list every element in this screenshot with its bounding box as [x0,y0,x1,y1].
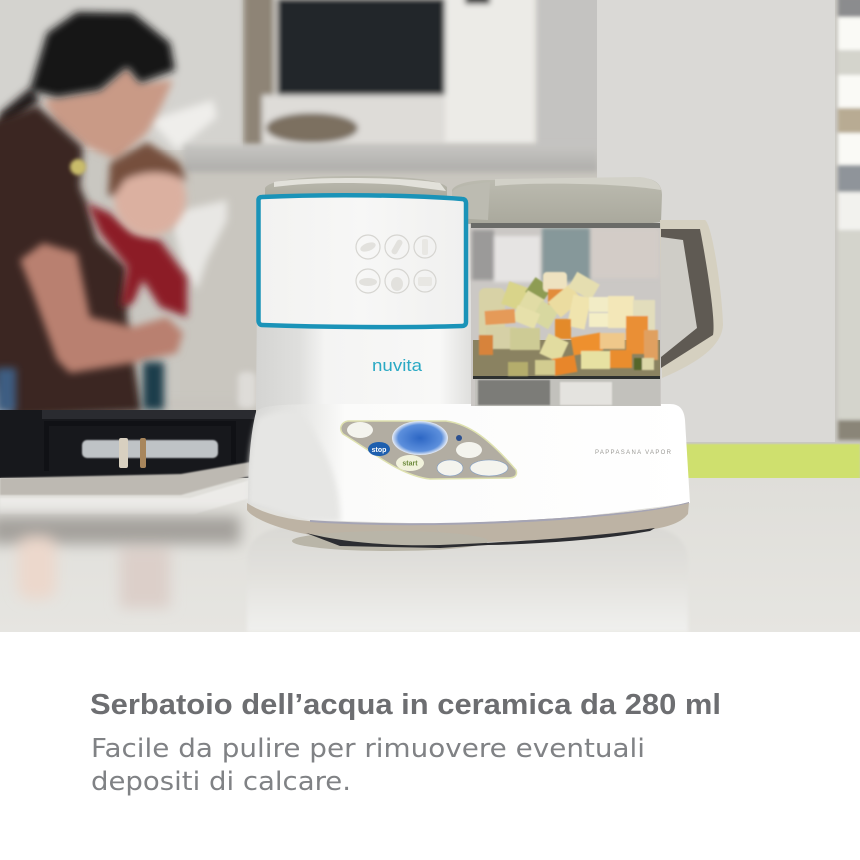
control panel [341,421,517,479]
jar [452,177,723,406]
stop button [368,442,390,456]
taupe base rim [247,502,689,543]
highlighted water tank panel [258,195,466,327]
nuvita logo: nuvita [372,356,423,375]
brown shirt [0,105,142,418]
water tank frame [258,195,466,327]
jar liquid [473,340,660,377]
caption body line 1: Facile da pulire per rimuovere eventuali [91,734,645,764]
start button: start [402,460,418,468]
model name on base: PAPPASANA VAPOR [595,450,672,456]
dark counter reflection [0,516,240,608]
jar glass [471,226,661,406]
caption body line 2: depositi di calcare. [91,767,351,797]
jar handle [660,220,723,378]
LCD display [392,421,448,455]
base unit [248,404,690,524]
jar base [475,378,660,406]
blue trousers hint [0,362,164,412]
steel stove edge [0,462,250,495]
green chopping board [685,444,860,479]
pillar on the right [597,0,835,442]
wall highlights [150,100,227,290]
appliance reflection [247,526,688,632]
rim accent line [310,502,689,525]
stove front reflection [0,480,250,514]
kitchen wall [0,0,860,480]
stop button: stop [372,447,386,454]
feet and shadow [292,528,655,551]
gas stove [0,410,256,478]
baby red jacket [87,203,187,317]
window blinds at far right [838,0,860,440]
vegetable cubes [479,272,658,376]
base shoulder shade [248,411,340,522]
bottle button [456,442,482,458]
steam column lid [265,176,447,200]
steam column body [256,196,472,410]
caption panel [0,632,860,860]
steam button [437,460,463,476]
mother's hair [0,12,175,138]
brooch highlight [70,159,86,175]
background stove items [158,372,256,410]
caption heading: Serbatoio dell’acqua in ceramica da 280 ml [90,689,721,721]
food processor appliance [247,176,723,551]
mother's face and neck [43,67,173,160]
indicator light [456,435,462,441]
photo: kitchen scene [0,0,860,632]
mode button [347,422,373,438]
program icons [356,235,436,293]
jar lid [452,178,662,225]
microwave oven [244,0,536,145]
combo button [470,460,508,476]
baby head [108,142,187,236]
start button [396,455,424,471]
shelf under microwave [184,145,598,172]
white counter top [0,478,860,632]
blurred mother and baby [0,12,187,418]
mother arm [20,243,183,373]
